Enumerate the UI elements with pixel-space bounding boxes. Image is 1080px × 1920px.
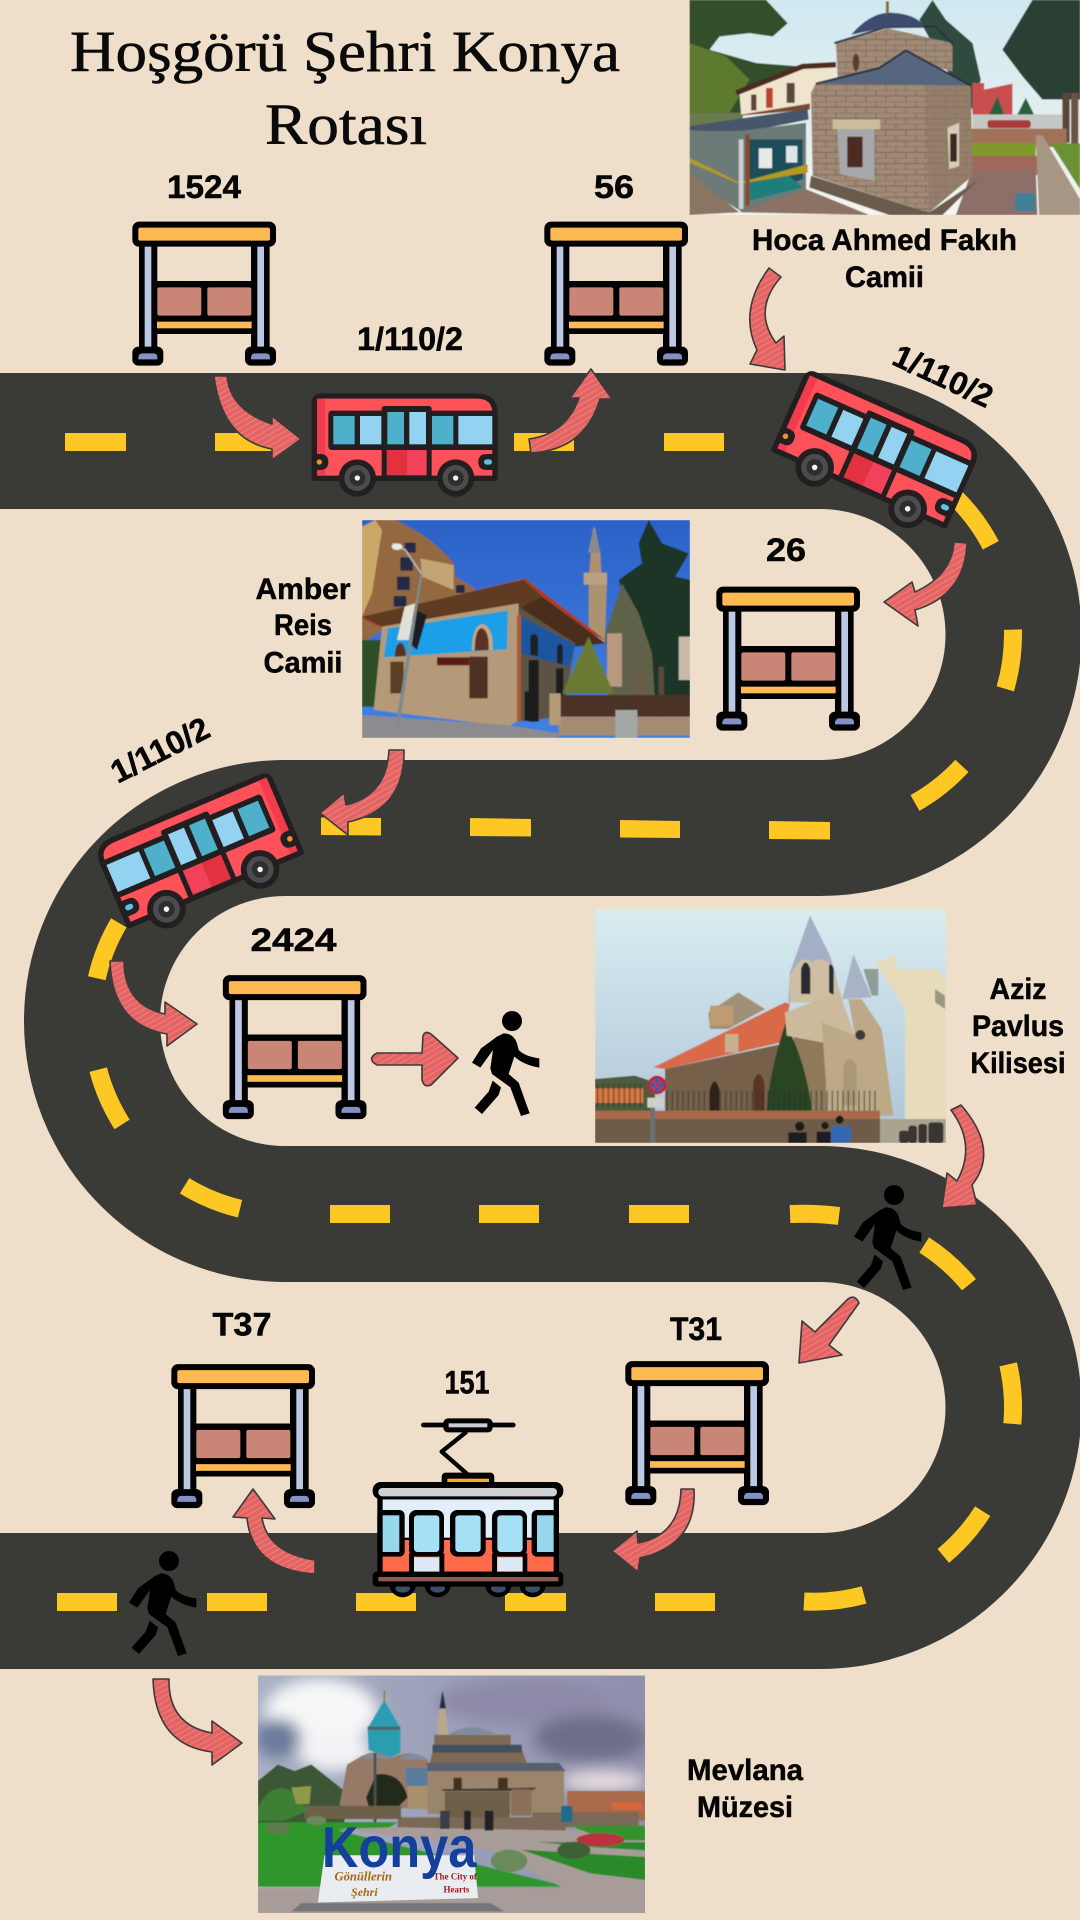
label: Hoca Ahmed Fakıh Camii: Camii bbox=[845, 261, 924, 294]
label: Amber Reis Camii: Camii bbox=[264, 646, 342, 680]
label: 2424: 2424 bbox=[250, 922, 337, 958]
photo: Mevlana Müzesi: Konya bbox=[322, 1816, 477, 1880]
walker: after 2424 stop bbox=[472, 1011, 539, 1116]
label: 1/110/2 straight: 1/110/2 bbox=[357, 321, 463, 357]
bus: straight on road bbox=[314, 396, 497, 497]
tram bbox=[373, 1418, 563, 1597]
shelter: T37 bbox=[171, 1364, 315, 1508]
label: Aziz Pavlus Kilisesi: Pavlus bbox=[972, 1010, 1064, 1043]
label: Aziz Pavlus Kilisesi: Aziz bbox=[990, 973, 1046, 1006]
arrow: stop 1524 to bus bbox=[214, 376, 301, 460]
label: Amber Reis Camii bbox=[256, 573, 351, 680]
road bbox=[0, 433, 1014, 1611]
label: T37: T37 bbox=[212, 1306, 272, 1342]
label: Aziz Pavlus Kilisesi bbox=[970, 973, 1066, 1080]
label: 56: 56 bbox=[594, 169, 634, 205]
photo: Aziz Pavlus Kilisesi bbox=[595, 909, 946, 1143]
arrow: road to stop T31 bbox=[799, 1297, 859, 1363]
label: Amber Reis Camii: Amber bbox=[256, 573, 351, 606]
label: T31: T31 bbox=[670, 1311, 722, 1347]
label: 26: 26 bbox=[766, 532, 806, 568]
arrow: left bus to stop 2424 bbox=[110, 961, 197, 1046]
walker: road bottom left bbox=[129, 1551, 196, 1656]
photo: Mevlana Müzesi: Şehri bbox=[351, 1885, 378, 1899]
title bbox=[70, 19, 620, 157]
bus: top right bend bbox=[766, 372, 982, 544]
photo: Mevlana Müzesi bbox=[258, 1676, 645, 1913]
label: Amber Reis Camii: Reis bbox=[274, 609, 332, 642]
photo: Mevlana Müzesi: Gönüllerin bbox=[334, 1870, 392, 1884]
shelter: 26 bbox=[716, 587, 860, 731]
shelter: 1524 bbox=[132, 222, 276, 366]
walker: road right bbox=[854, 1185, 921, 1290]
arrow: stop 2424 to walker bbox=[372, 1032, 458, 1086]
arrow: bus to stop 56 bbox=[529, 369, 612, 453]
arrow: Aziz Pavlus to road bbox=[942, 1105, 984, 1208]
shelter: 56 bbox=[544, 222, 688, 366]
label: 1524: 1524 bbox=[167, 169, 241, 205]
shelter: T31 bbox=[625, 1361, 769, 1505]
label: 151: 151 bbox=[444, 1364, 490, 1400]
photo: Mevlana Müzesi: The City of bbox=[434, 1871, 478, 1881]
shelter: 2424 bbox=[223, 975, 366, 1119]
arrow: Amber Reis to road bbox=[320, 750, 404, 835]
label: 1/110/2 right bend: 1/110/2 bbox=[887, 337, 999, 415]
title: Rotası bbox=[265, 92, 427, 157]
arrow: stop T31 to tram bbox=[612, 1489, 694, 1572]
arrow: walker to Mevlana bbox=[153, 1679, 242, 1765]
label: Hoca Ahmed Fakıh Camii: Hoca Ahmed Fakıh bbox=[752, 224, 1017, 257]
label: Mevlana Müzesi: Müzesi bbox=[697, 1791, 793, 1824]
bus: left bend bbox=[94, 774, 309, 944]
photo: Hoca Ahmed Fakıh Camii bbox=[690, 0, 1080, 215]
title: Hoşgörü Şehri Konya bbox=[70, 19, 620, 84]
arrow: to stop 26 bbox=[884, 542, 967, 626]
photo: Amber Reis Camii bbox=[362, 520, 690, 738]
label: Aziz Pavlus Kilisesi: Kilisesi bbox=[970, 1047, 1066, 1080]
arrow: Hoca Ahmed Fakıh to road bbox=[750, 268, 785, 370]
label: Mevlana Müzesi: Mevlana bbox=[687, 1754, 803, 1787]
photo: Mevlana Müzesi: Hearts bbox=[444, 1885, 470, 1895]
label: Mevlana Müzesi bbox=[687, 1754, 803, 1824]
arrow: tram to stop T37 bbox=[233, 1489, 315, 1574]
label: 1/110/2 left bend: 1/110/2 bbox=[105, 710, 215, 790]
label: Hoca Ahmed Fakıh Camii bbox=[752, 224, 1017, 294]
